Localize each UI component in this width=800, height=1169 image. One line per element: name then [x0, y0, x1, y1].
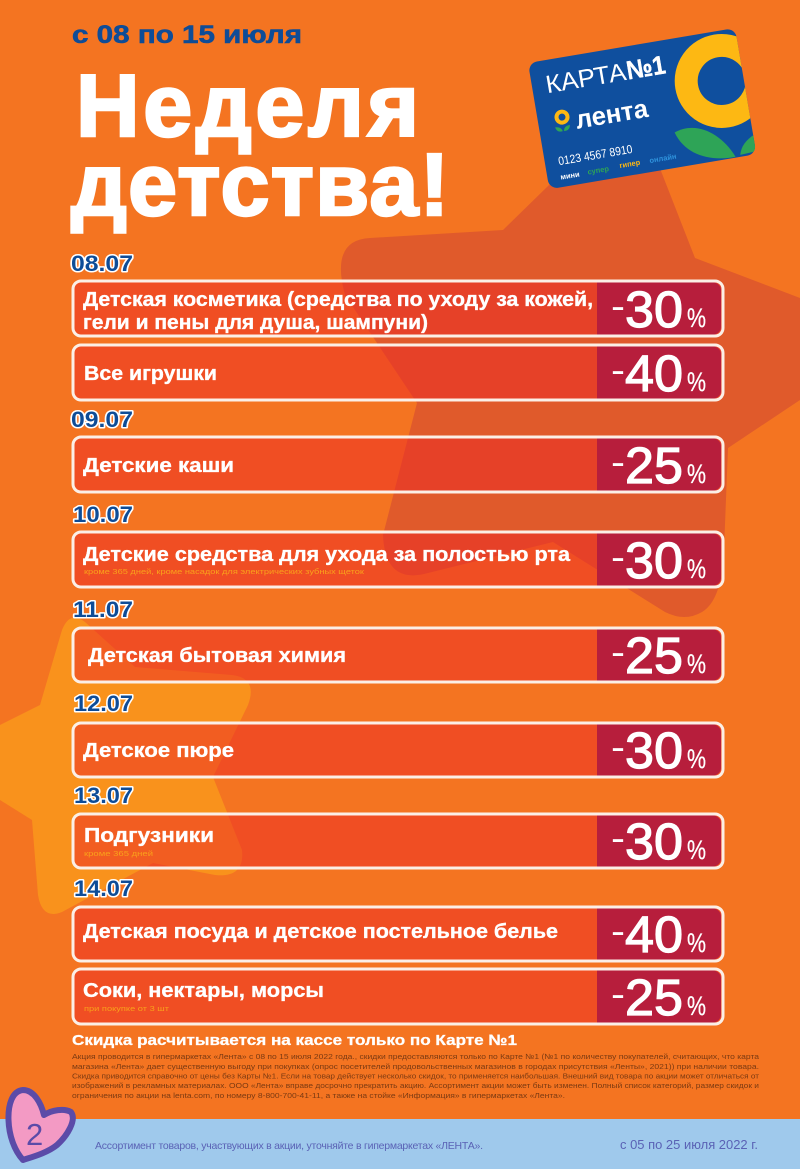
offer: juices: -	[611, 973, 625, 1014]
store formats: мини	[560, 169, 581, 182]
offer: tableware and bedding	[73, 906, 723, 963]
discount note: Скидка расчитывается на кассе только по Карте №1	[72, 1032, 517, 1049]
date 12.07: 12.07	[74, 691, 133, 716]
legal text	[72, 1052, 760, 1100]
offer: oral care: -	[611, 536, 625, 577]
lenta logo: лента	[573, 93, 651, 135]
offer: porridge: %	[687, 459, 706, 489]
title: детства!	[71, 135, 449, 234]
offer: diapers: %	[687, 835, 706, 865]
footer note: Ассортимент товаров, участвующих в акции, уточняйте в гипермаркетах «ЛЕНТА».	[95, 1140, 483, 1152]
offer: household chemicals: -	[611, 631, 625, 672]
offer: porridge	[73, 437, 723, 494]
footer validity dates: с 05 по 25 июля 2022 г.	[620, 1137, 758, 1152]
icon: flower ring	[681, 40, 763, 122]
date 11.07: 11.07	[73, 597, 133, 622]
offer: toys: 40	[625, 345, 683, 402]
offer: household chemicals	[73, 627, 723, 684]
offer: baby puree: Детское пюре	[83, 740, 234, 762]
footer band	[0, 1119, 800, 1169]
offer: diapers: Подгузники	[84, 825, 214, 847]
offer: household chemicals: %	[687, 649, 706, 679]
legal text: Скидка приводится справочно от цены без Карты №1. Если на товар действует несколько скидок, то применяется наибольшая. Внешний вид товара по акции может отличаться от	[72, 1072, 760, 1080]
legal text: магазина «Лента» дает существенную выгоду при покупках (опрос посетителей продовольственных магазинов в городах присутствия «Ленты», 2021)) при наличии товара.	[72, 1062, 759, 1071]
small background star	[0, 618, 251, 914]
card name: КАРТА	[544, 58, 629, 99]
store formats	[559, 152, 677, 182]
offer: cosmetics: -	[611, 285, 625, 326]
offer: toys: -	[611, 349, 625, 390]
offer: household chemicals: Детская бытовая химия	[88, 645, 346, 667]
legal text: Акция проводится в гипермаркетах «Лента» с 08 по 15 июля 2022 года., скидки предоставляются только по Карте №1 (№1 по количеству покупателей, считающих, что карта	[72, 1052, 760, 1061]
offer: diapers: 30	[625, 813, 683, 870]
date 10.07: 10.07	[73, 502, 133, 527]
date 08.07: 08.07	[71, 251, 133, 276]
loyalty card	[528, 26, 770, 189]
offer: juices: при покупке от 3 шт	[84, 1004, 170, 1013]
title: Неделя	[76, 56, 419, 155]
offer: diapers: кроме 365 дней	[84, 849, 153, 858]
store formats: супер	[587, 164, 610, 177]
offer: porridge: Детские каши	[83, 455, 234, 477]
store formats: гипер	[619, 158, 641, 170]
date 09.07: 09.07	[71, 407, 133, 432]
offer: cosmetics: гели и пены для душа, шампуни)	[83, 312, 428, 334]
offer: tableware and bedding: Детская посуда и детское постельное белье	[83, 921, 558, 943]
offer: juices: %	[687, 991, 706, 1021]
offer: cosmetics: Детская косметика (средства по уходу за кожей,	[83, 289, 593, 311]
offer: toys	[73, 345, 723, 402]
offer: juices: 25	[625, 969, 683, 1026]
offer: juices: Соки, нектары, морсы	[83, 980, 324, 1002]
offer: porridge: 25	[625, 437, 683, 494]
offer: oral care: 30	[625, 532, 683, 589]
offer: cosmetics	[73, 281, 723, 338]
offer: oral care: кроме 365 дней, кроме насадок для электрических зубных щеток	[84, 567, 365, 576]
offer: toys: %	[687, 367, 706, 397]
offer: juices	[73, 969, 723, 1026]
offer: baby puree: -	[611, 726, 625, 767]
offer: baby puree: 30	[625, 722, 683, 779]
card number: 0123 4567 8910	[557, 142, 634, 168]
period heading: с 08 по 15 июля	[72, 21, 302, 49]
offer: tableware and bedding: 40	[625, 906, 683, 963]
offer: tableware and bedding: -	[611, 910, 625, 951]
offer: porridge: -	[611, 441, 625, 482]
icon: heart page number	[8, 1090, 73, 1160]
title	[71, 56, 449, 234]
icon: flower leaves	[674, 128, 756, 158]
offer: household chemicals: 25	[625, 627, 683, 684]
icon: heart page number: 2	[26, 1117, 43, 1152]
date 14.07: 14.07	[74, 876, 133, 901]
offer: diapers: -	[611, 817, 625, 858]
offer: baby puree: %	[687, 744, 706, 774]
offer: oral care: Детские средства для ухода за полостью рта	[83, 544, 571, 566]
offer: tableware and bedding: %	[687, 928, 706, 958]
date 13.07: 13.07	[74, 783, 133, 808]
offer: cosmetics: %	[687, 303, 706, 333]
offer: oral care: %	[687, 554, 706, 584]
store formats: онлайн	[649, 152, 677, 165]
offer: toys: Все игрушки	[84, 363, 217, 385]
offer: diapers	[73, 813, 723, 870]
offer: cosmetics: 30	[625, 281, 683, 338]
offer: oral care	[73, 532, 723, 589]
large background star	[341, 102, 800, 617]
legal text: изображений в рекламных материалах. ООО «Лента» вправе досрочно прекратить акцию. Ассортимент акции может быть изменен. Полный список категорий, размер скидок и	[72, 1081, 759, 1090]
legal text: ограничения по акции на lenta.com, по номеру 8-800-700-41-11, а также на стойке «Информация» в гипермаркетах «Лента».	[72, 1091, 565, 1100]
offer: baby puree	[73, 722, 723, 779]
loyalty card: №1	[624, 49, 668, 85]
